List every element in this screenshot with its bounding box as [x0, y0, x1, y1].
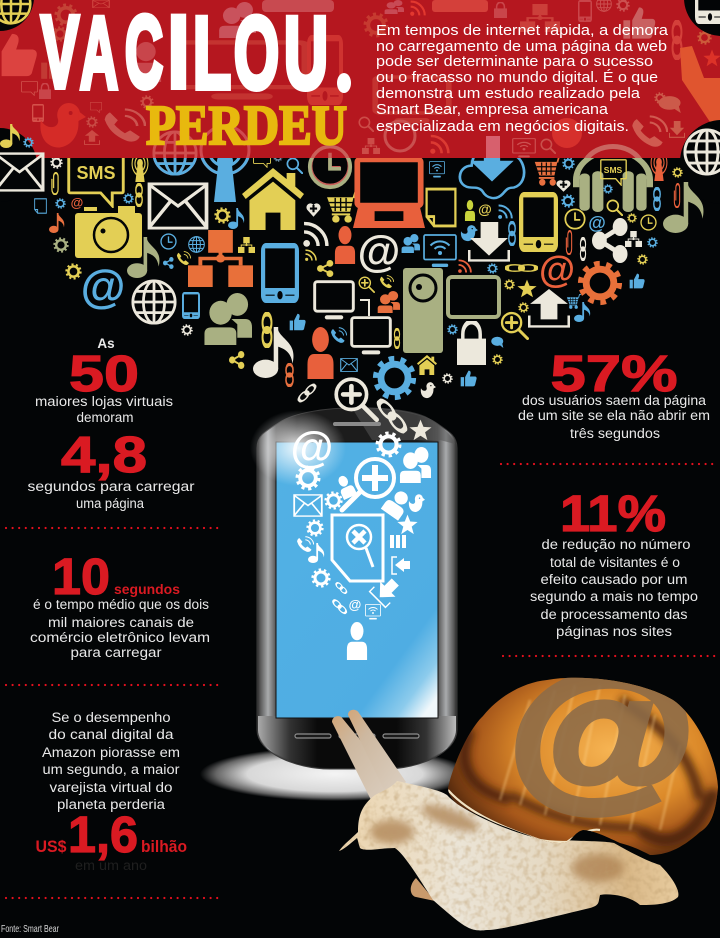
icon: person tilted — [381, 487, 413, 521]
icon: gear — [448, 325, 457, 334]
stat: 11 percent: total de visitantes é o — [550, 555, 680, 570]
ghost icon: lock — [39, 83, 51, 99]
text block: intro: Smart Bear, empresa americana — [376, 101, 609, 118]
icon: gear white — [313, 570, 329, 586]
icon: handset — [331, 328, 347, 343]
phone body — [257, 408, 457, 769]
stat: 57 percent: três segundos — [570, 426, 660, 441]
icon: bird white — [409, 494, 425, 512]
icon: house — [417, 355, 437, 375]
phone device — [250, 408, 457, 769]
stat: 11 percent: 11% — [560, 485, 666, 542]
ghost icon: gear — [655, 93, 665, 103]
icon: phone cream — [695, 0, 720, 24]
ghost icon: thumb — [41, 51, 69, 79]
icon: rows — [390, 535, 406, 548]
icon: gear — [638, 255, 647, 264]
icon: document — [35, 199, 46, 213]
icon: person — [465, 200, 475, 221]
stat: 50 largest stores — [28, 336, 195, 511]
icon: gear — [673, 168, 682, 177]
shell dark bands — [464, 700, 715, 840]
icon: download — [469, 222, 509, 260]
ghost icon: slider — [262, 0, 334, 12]
phone top reflection — [352, 408, 455, 444]
icon: camera — [75, 206, 142, 258]
icon: bird — [421, 382, 436, 398]
icon: gear white — [297, 467, 319, 489]
stat: Amazon loss: um segundo, a maior — [42, 762, 180, 777]
stat: Amazon loss: planeta perderia — [57, 797, 166, 812]
ghost icon: rss — [410, 2, 425, 16]
icon: link — [654, 188, 660, 210]
ghost icon: gear — [53, 27, 67, 41]
icon: heart — [556, 180, 571, 192]
ghost icon: at — [385, 121, 415, 151]
icon: paperclip — [52, 173, 58, 194]
icon: vertical camera — [403, 268, 443, 353]
icon: gear white — [308, 521, 322, 535]
stat: 50 largest stores: 4,8 — [61, 426, 147, 483]
icon: sms bubble: SMS — [76, 163, 116, 183]
ghost icon: gear — [141, 96, 153, 108]
stat: 50 largest stores: demoram — [76, 410, 134, 425]
icon: gear white — [377, 433, 400, 456]
stat: 57 percent: 57% — [550, 345, 678, 402]
icon: star white — [397, 515, 418, 534]
text block: intro — [376, 22, 669, 135]
icon: paperclip — [566, 231, 572, 254]
icon: note white — [308, 543, 324, 563]
snail shell — [440, 642, 720, 860]
icon: tilted download — [370, 574, 403, 607]
icon: magnifier plus — [359, 277, 374, 292]
icon: gear — [216, 209, 229, 222]
icon: note — [574, 302, 590, 322]
stat: Amazon loss: Se o desempenho — [52, 710, 170, 725]
icon: gear — [493, 355, 502, 364]
stat: 50 largest stores: maiores lojas virtuais — [35, 394, 173, 409]
icon: upload — [529, 289, 569, 326]
icon: gear — [562, 195, 574, 207]
ghost icon: circle person — [131, 42, 161, 82]
ghost icon: gear — [698, 31, 711, 44]
ghost icon: globe — [154, 132, 196, 174]
stat: 50 largest stores: uma página — [76, 496, 144, 511]
icon: person white — [347, 622, 367, 660]
ghost icon: cloud arrow — [486, 136, 500, 158]
text block: intro: Em tempos de internet rápida, a demora — [376, 22, 669, 39]
icon: person tilted — [334, 473, 357, 500]
ghost icon: chain — [673, 22, 681, 58]
title: VACILOU. — [41, 0, 351, 110]
icon: gear — [488, 264, 497, 273]
icon: globe — [153, 158, 197, 176]
stat: 11 percent: páginas nos sites — [556, 624, 672, 639]
ghost icon: handset — [105, 109, 145, 142]
ghost icon: wifi monitor — [513, 139, 535, 157]
icon: gear blue — [24, 138, 33, 147]
icon: note — [49, 213, 64, 233]
stat: Amazon loss: US$ — [36, 837, 67, 856]
stat: 10 seconds: mil maiores canais de — [48, 615, 194, 630]
ghost icon: tablet — [307, 35, 343, 105]
ghost icon: tablet — [375, 77, 449, 123]
icon: link — [136, 184, 142, 206]
icon: gear — [519, 303, 528, 312]
icon: hierarchy — [625, 231, 642, 247]
icon: wifi monitor small — [429, 162, 445, 177]
stat: 11 percent: efeito causado por um — [540, 572, 688, 587]
icon: link — [394, 329, 400, 348]
snail skin shading — [370, 799, 624, 882]
ghost icon: star — [703, 50, 720, 66]
stat: Amazon loss: do canal digital da — [48, 727, 174, 742]
ghost icon: gear — [365, 14, 387, 36]
icon: rss yellow — [305, 250, 316, 261]
text block: intro: no carregamento de uma página da web — [376, 38, 667, 55]
icon: gear — [124, 194, 133, 203]
icon: at: @ — [478, 201, 492, 217]
stat: Amazon loss — [36, 710, 187, 873]
stat: 10 seconds: 10 — [52, 548, 110, 605]
icon: rss — [498, 205, 512, 219]
icon: document with magnifier — [332, 515, 383, 581]
icon: monitor 2 — [352, 300, 390, 354]
icon: link — [332, 599, 347, 614]
ghost icon: hierarchy — [362, 138, 380, 154]
snail skin texture — [339, 781, 678, 930]
icon: note cream — [253, 327, 294, 378]
stat: 57 percent: dos usuários saem da página — [522, 393, 707, 408]
icon: sms bubble — [69, 154, 123, 206]
icon: document yellow — [427, 189, 455, 226]
icon: thumb — [630, 274, 645, 288]
shell streaks — [500, 685, 680, 830]
ghost icon: gear — [617, 0, 629, 11]
title: PERDEU: PERDEU — [146, 95, 347, 157]
icon: cloud download — [460, 140, 524, 198]
icon cloud: digital symbols — [0, 126, 704, 403]
stat: 57 percent — [518, 345, 710, 441]
icon: magnifier plus — [502, 313, 528, 339]
icon: heart — [306, 203, 321, 217]
icon: monitor — [315, 282, 353, 319]
ghost icon: sms — [90, 102, 102, 113]
icon: at cream: @ — [358, 227, 400, 276]
snail illustration — [332, 642, 720, 930]
icon: gear — [56, 199, 65, 208]
ghost icon: cloud — [658, 96, 681, 113]
icon: rss cream — [303, 224, 327, 247]
icon: link horizontal — [507, 265, 536, 271]
stat: 10 seconds — [30, 548, 210, 660]
icon: at: @ — [71, 195, 83, 210]
ghost icon: monitor — [178, 42, 306, 100]
icon: paperclip — [674, 184, 680, 207]
ghost icon: hierarchy — [520, 4, 560, 32]
ghost icon: rss — [430, 136, 448, 154]
ghost icon: handset — [632, 116, 667, 147]
screen glow — [250, 410, 346, 486]
stat: 10 seconds: comércio eletrônico levam — [30, 630, 210, 645]
icon: globe cream — [133, 281, 175, 323]
snail tentacles — [332, 710, 406, 802]
phone bottom bezel — [258, 716, 456, 768]
ghost icon: headphones arc — [586, 146, 640, 160]
ghost icon: phone — [578, 0, 592, 22]
icon: at blue: @ — [588, 213, 606, 233]
icon: rss — [458, 260, 471, 273]
icon: at orange: @ — [539, 249, 575, 290]
ghost icon: gear — [56, 5, 76, 25]
icon: house — [242, 168, 304, 230]
icon: gear — [51, 157, 62, 168]
icon: link orange — [286, 364, 293, 386]
icon: tablet olive — [448, 277, 499, 317]
stat: 50 largest stores: 50 — [69, 345, 139, 402]
icon: wifi monitor — [424, 235, 456, 267]
stat: Amazon loss: varejista virtual do — [50, 780, 172, 795]
icon: note — [228, 208, 244, 229]
icon: hierarchy orange — [188, 230, 253, 287]
text block: intro: demonstra um estudo realizado pela — [376, 85, 641, 102]
ghost icon: gear — [87, 117, 97, 127]
icon: magnifier plus white — [342, 459, 394, 510]
icon: hierarchy small — [238, 237, 255, 253]
icon: headphones — [576, 151, 650, 212]
ghost icon: download — [669, 121, 685, 137]
icon: gear — [505, 280, 514, 289]
stat: 11 percent: de processamento das — [540, 607, 688, 622]
icon: link — [335, 582, 348, 594]
stat: Amazon loss: em um ano — [75, 858, 147, 873]
icon: link — [509, 222, 515, 244]
icon: antenna orange — [651, 151, 667, 181]
icon: left arrow tray — [392, 557, 410, 574]
icon: globe yellow — [0, 0, 30, 23]
stat: 50 largest stores: As — [97, 336, 115, 351]
icon: thumb — [461, 371, 477, 386]
ghost icon: upload — [84, 130, 100, 144]
icon: gear — [563, 158, 574, 169]
icon: share — [229, 351, 244, 369]
icon: handset — [177, 252, 191, 265]
snail body — [339, 781, 678, 930]
icon: gear — [648, 238, 657, 247]
stat: 50 largest stores: segundos para carregar — [28, 479, 195, 494]
icon: clock — [161, 234, 176, 249]
icon: share — [163, 257, 174, 269]
icon: sms — [601, 160, 626, 185]
icon: sms small — [253, 158, 271, 168]
icon: clock — [641, 215, 656, 230]
stat: Amazon loss: bilhão — [141, 837, 187, 856]
icon: cart — [535, 156, 562, 186]
icon: clock — [565, 209, 585, 229]
ghost icon: antenna rings — [201, 126, 249, 174]
stat: 10 seconds: segundos — [114, 582, 180, 597]
icon: gear — [443, 374, 452, 383]
icon: globe cream — [685, 130, 720, 174]
ghost icon: bird — [40, 103, 86, 148]
ghost icon: thumb — [0, 34, 37, 76]
icon: link — [263, 314, 271, 346]
icon: note olive — [663, 182, 704, 233]
shell rim — [448, 790, 600, 842]
icon: wifi box — [365, 604, 381, 620]
icon: link diagonal — [297, 383, 317, 403]
ghost icon: lock — [494, 2, 507, 18]
stat: Amazon loss: Amazon piorasse em — [42, 745, 180, 760]
phone buttons — [295, 734, 419, 738]
icon: handset white — [297, 537, 314, 552]
spotlight under phone — [200, 747, 470, 801]
icon: cart — [327, 192, 354, 223]
ghost icon: slider — [432, 0, 488, 12]
icon: magnifier — [607, 200, 622, 215]
shell at sign: @ — [509, 642, 695, 823]
icon: mail blue — [341, 359, 357, 371]
icon: tablet — [182, 292, 200, 319]
icon: gear white — [326, 493, 341, 508]
icon: person orange — [307, 327, 334, 379]
stat: 11 percent: de redução no número — [542, 537, 690, 552]
icon: share — [317, 260, 333, 277]
icon: gear — [54, 238, 68, 252]
panel: red header banner — [0, 0, 720, 185]
ghost icon: globe — [597, 0, 611, 11]
text block: intro: especializada em negócios digitais. — [376, 118, 629, 135]
ghost icon: clock — [311, 147, 349, 185]
phone speaker — [333, 422, 381, 426]
icon: gear — [628, 214, 636, 222]
icon: gear orange — [581, 264, 619, 302]
icon: phone yellow — [519, 192, 558, 252]
corner: top-right black cut with phone — [684, 0, 720, 36]
icon: at blue: @ — [81, 260, 125, 312]
icon: globe — [189, 237, 204, 252]
corner: top-left black cut with globe — [0, 0, 34, 31]
icon: people — [402, 234, 420, 253]
icon: mail large — [149, 184, 207, 228]
icon: share — [592, 218, 628, 263]
icon: mail white — [294, 495, 322, 516]
icon: laptop — [353, 159, 425, 228]
icon: at white: @ — [291, 423, 333, 472]
ghost icon: people — [219, 2, 256, 38]
icon: star — [517, 280, 537, 297]
icon: gear — [274, 158, 283, 162]
stat: 10 seconds: para carregar — [70, 645, 162, 660]
icon: people — [378, 291, 400, 313]
corner: bottom-right black cut with globe — [680, 120, 720, 204]
icon: mail — [0, 154, 43, 190]
ghost icon: people — [385, 0, 404, 14]
icon: music note — [0, 124, 20, 148]
icon: magnifier on phone top — [336, 379, 377, 420]
text block: intro: pode ser determinante para o sucesso — [376, 53, 653, 70]
ghost icon: sms — [22, 81, 37, 95]
icon: antenna — [132, 158, 148, 182]
stat: 57 percent: de um site se ela não abrir em — [518, 408, 710, 423]
corner: bottom-left black cut with note — [0, 124, 37, 202]
icons on the screen — [291, 379, 432, 660]
icon: cart — [567, 295, 581, 309]
snail small foot — [411, 878, 435, 901]
icon: link diagonal — [376, 399, 408, 433]
icon: lock — [457, 322, 486, 365]
icon: clock — [308, 158, 352, 190]
ghost icon: magnifier — [541, 139, 555, 153]
icon: bird — [461, 225, 478, 241]
icon: people olive — [204, 293, 252, 345]
icon: gear — [604, 185, 612, 193]
icon: sms: SMS — [604, 165, 623, 175]
ghost icon: magnifier — [359, 117, 373, 131]
stat: 11 percent — [530, 485, 698, 639]
icon: gear blue large — [376, 359, 413, 397]
ghost icon: mail — [93, 0, 109, 8]
icon: gear — [182, 325, 192, 335]
stat: 11 percent: segundo a mais no tempo — [530, 589, 698, 604]
icon: link — [580, 238, 586, 260]
icon: note olive — [127, 237, 159, 278]
icon: magnifier — [287, 158, 302, 173]
text block: intro: ou o fracasso no mundo digital. É o que — [376, 69, 658, 86]
icon: at white: @ — [349, 597, 361, 612]
phone screen — [276, 442, 438, 718]
icon: people white — [400, 447, 431, 483]
ghost icon: phone — [32, 104, 44, 122]
ghost icon: red circle — [552, 118, 582, 148]
icon: antenna blue — [200, 158, 250, 202]
icon: star — [409, 420, 432, 440]
icon: handset — [380, 276, 394, 288]
ghost icon: thumb — [623, 7, 655, 39]
icon: phone blue — [261, 243, 299, 303]
stat: Amazon loss: 1,6 — [68, 806, 138, 863]
icon: thumb — [290, 314, 306, 330]
icon: person — [335, 226, 355, 264]
icon: bubble — [491, 337, 503, 348]
ghost icon: pointing hand — [680, 46, 720, 122]
icon: gear — [67, 265, 80, 278]
source note: Fonte: Smart Bear — [1, 923, 59, 935]
stat: 10 seconds: é o tempo médio que os dois — [33, 597, 209, 612]
